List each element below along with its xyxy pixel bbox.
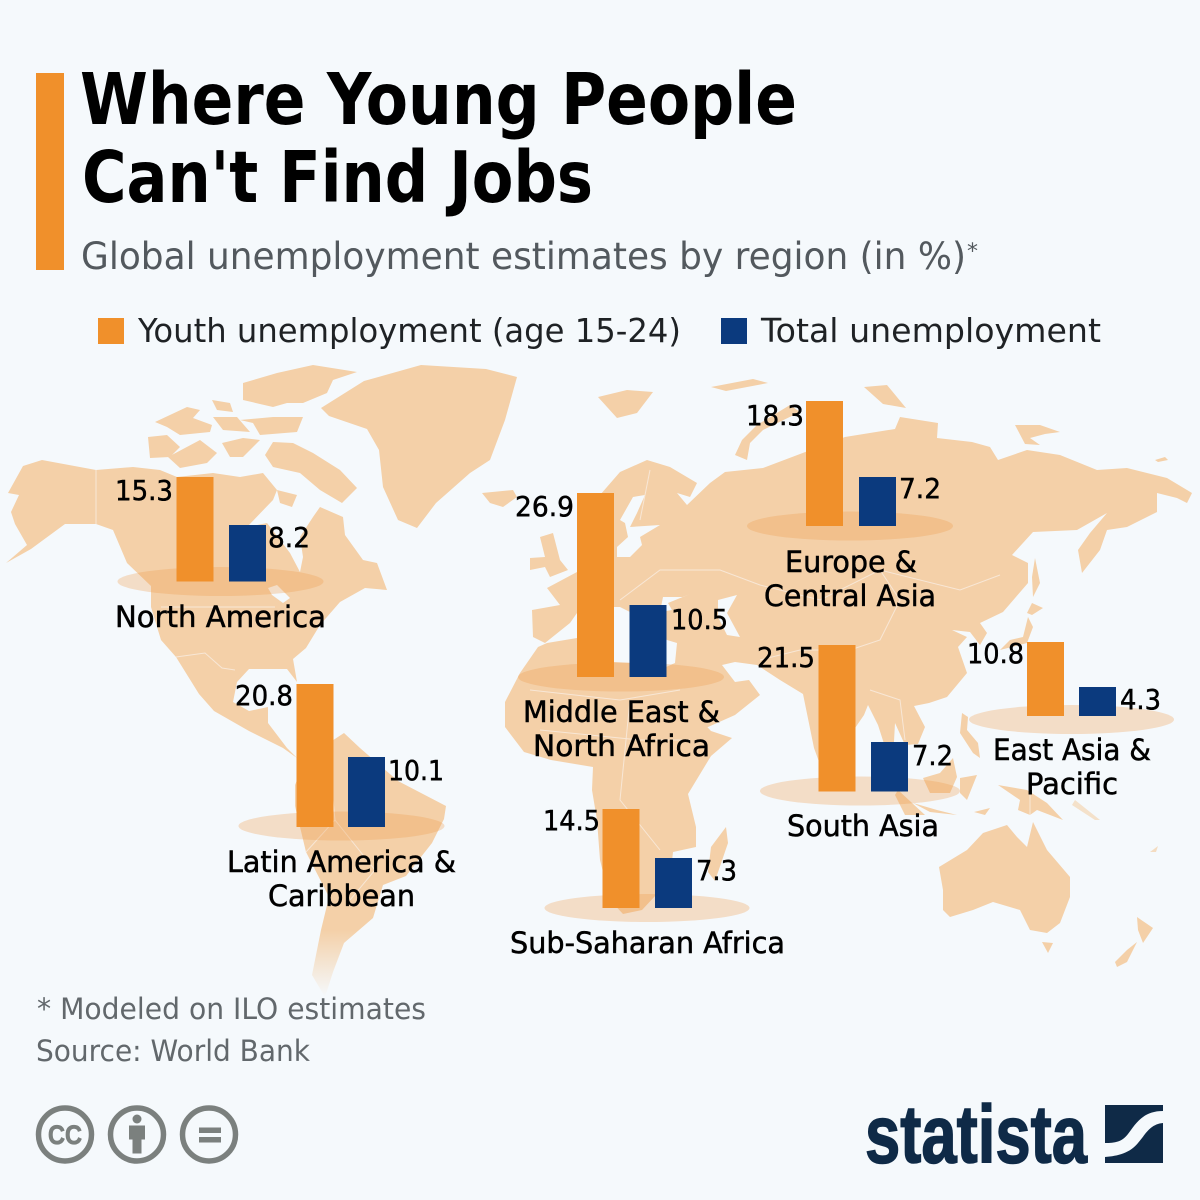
legend: total unemployment: Total unemployment xyxy=(760,311,1101,350)
map: Tasmania and New Zealand xyxy=(1042,917,1153,967)
value 20.8: 20.8 xyxy=(235,679,293,712)
value 18.3: 18.3 xyxy=(746,399,804,432)
bar total 8.2 xyxy=(229,525,266,582)
bar total 4.3 xyxy=(1079,687,1116,716)
bar youth 15.3 xyxy=(176,477,214,582)
map: Southeast Asian islands xyxy=(895,713,1158,852)
map: Sakhalin and Japan xyxy=(1000,558,1043,650)
logo mark xyxy=(1105,1105,1163,1163)
label: Latin America & xyxy=(227,845,456,879)
legend: youth unemployment: Youth unemployment (age 15-24) xyxy=(137,311,681,350)
value 14.5: 14.5 xyxy=(543,804,600,837)
label: Caribbean xyxy=(268,879,415,913)
value 8.2: 8.2 xyxy=(268,521,310,554)
statista logo xyxy=(865,1090,1163,1180)
chart: North America xyxy=(115,474,326,634)
label: Sub-Saharan Africa xyxy=(510,926,785,960)
map: North America xyxy=(6,460,387,758)
bar youth 18.3 xyxy=(806,401,843,526)
bar youth 26.9 xyxy=(577,493,614,677)
bar youth 20.8 xyxy=(296,684,334,827)
value 10.5: 10.5 xyxy=(671,603,728,636)
map: Iceland and Britain xyxy=(482,490,568,577)
chart: East Asia and Pacific xyxy=(967,637,1174,801)
base ellipse xyxy=(969,705,1174,734)
label: Central Asia xyxy=(764,579,936,613)
label: South Asia xyxy=(787,809,939,843)
value 4.3: 4.3 xyxy=(1120,683,1161,716)
label xyxy=(993,733,1151,801)
subtitle: Global unemployment estimates by region (in %) xyxy=(81,235,966,278)
map: Greenland xyxy=(321,365,517,528)
value 10.1: 10.1 xyxy=(388,754,444,787)
map: Arctic islands xyxy=(148,365,357,507)
map: Arctic Eurasian islands xyxy=(598,379,1168,462)
map: Great Lakes xyxy=(268,585,290,603)
base ellipse xyxy=(238,812,444,840)
base ellipse xyxy=(747,512,953,540)
title: Where Young People xyxy=(80,58,797,141)
chart: South Asia xyxy=(757,641,960,843)
label: North America xyxy=(115,600,326,634)
chart: Middle East and North Africa xyxy=(515,490,728,763)
subtitle: * xyxy=(967,239,978,263)
bar total 7.3 xyxy=(655,858,692,908)
footnote and source: Source: World Bank xyxy=(36,1034,310,1068)
bar total 7.2 xyxy=(871,742,908,792)
label: Pacific xyxy=(1026,767,1118,801)
footnote and source xyxy=(36,992,426,1068)
bar youth 14.5 xyxy=(602,809,640,908)
map: Eurasia xyxy=(532,417,1192,793)
map: Madagascar xyxy=(708,827,728,881)
bar total 7.2 xyxy=(859,477,896,526)
world map xyxy=(6,365,1192,997)
bar youth 10.8 xyxy=(1027,642,1064,716)
value 21.5: 21.5 xyxy=(757,641,815,674)
value 26.9: 26.9 xyxy=(515,490,574,523)
map: Africa xyxy=(505,638,732,914)
bar total 10.1 xyxy=(348,757,385,827)
label: Europe & xyxy=(785,545,917,579)
label: North Africa xyxy=(533,729,710,763)
bar total 10.5 xyxy=(630,605,666,677)
chart: Sub-Saharan Africa xyxy=(510,804,785,960)
title: Can't Find Jobs xyxy=(82,136,593,219)
map: Australia xyxy=(939,822,1070,933)
value 15.3: 15.3 xyxy=(115,474,173,507)
map: South America xyxy=(295,733,446,997)
title xyxy=(80,58,797,219)
icon: attribution xyxy=(110,1108,164,1161)
map: Baltic Sea xyxy=(617,495,660,557)
chart: Latin America and Caribbean xyxy=(227,679,456,913)
label: East Asia & xyxy=(993,733,1151,767)
map: Black Sea xyxy=(660,594,690,612)
icon: creative commons: CC xyxy=(48,1120,82,1150)
map: Caspian Sea xyxy=(718,595,740,637)
label xyxy=(227,845,456,913)
value 7.2: 7.2 xyxy=(899,472,941,505)
icon: creative commons xyxy=(38,1108,92,1161)
bar youth 21.5 xyxy=(818,645,856,792)
base ellipse xyxy=(518,662,724,692)
base ellipse xyxy=(118,567,324,596)
value 10.8: 10.8 xyxy=(967,637,1024,670)
base ellipse xyxy=(544,894,750,922)
label xyxy=(764,545,936,613)
logo wordmark: statista xyxy=(865,1090,1088,1180)
label: Middle East & xyxy=(523,695,720,729)
footnote and source: * Modeled on ILO estimates xyxy=(37,992,426,1026)
chart: Europe and Central Asia xyxy=(746,399,953,613)
accent bar xyxy=(36,73,64,270)
icon: no derivatives xyxy=(182,1108,236,1161)
base ellipse xyxy=(760,776,960,806)
legend xyxy=(98,311,1101,350)
value 7.3: 7.3 xyxy=(696,854,737,887)
label xyxy=(523,695,720,763)
value 7.2: 7.2 xyxy=(912,739,953,772)
